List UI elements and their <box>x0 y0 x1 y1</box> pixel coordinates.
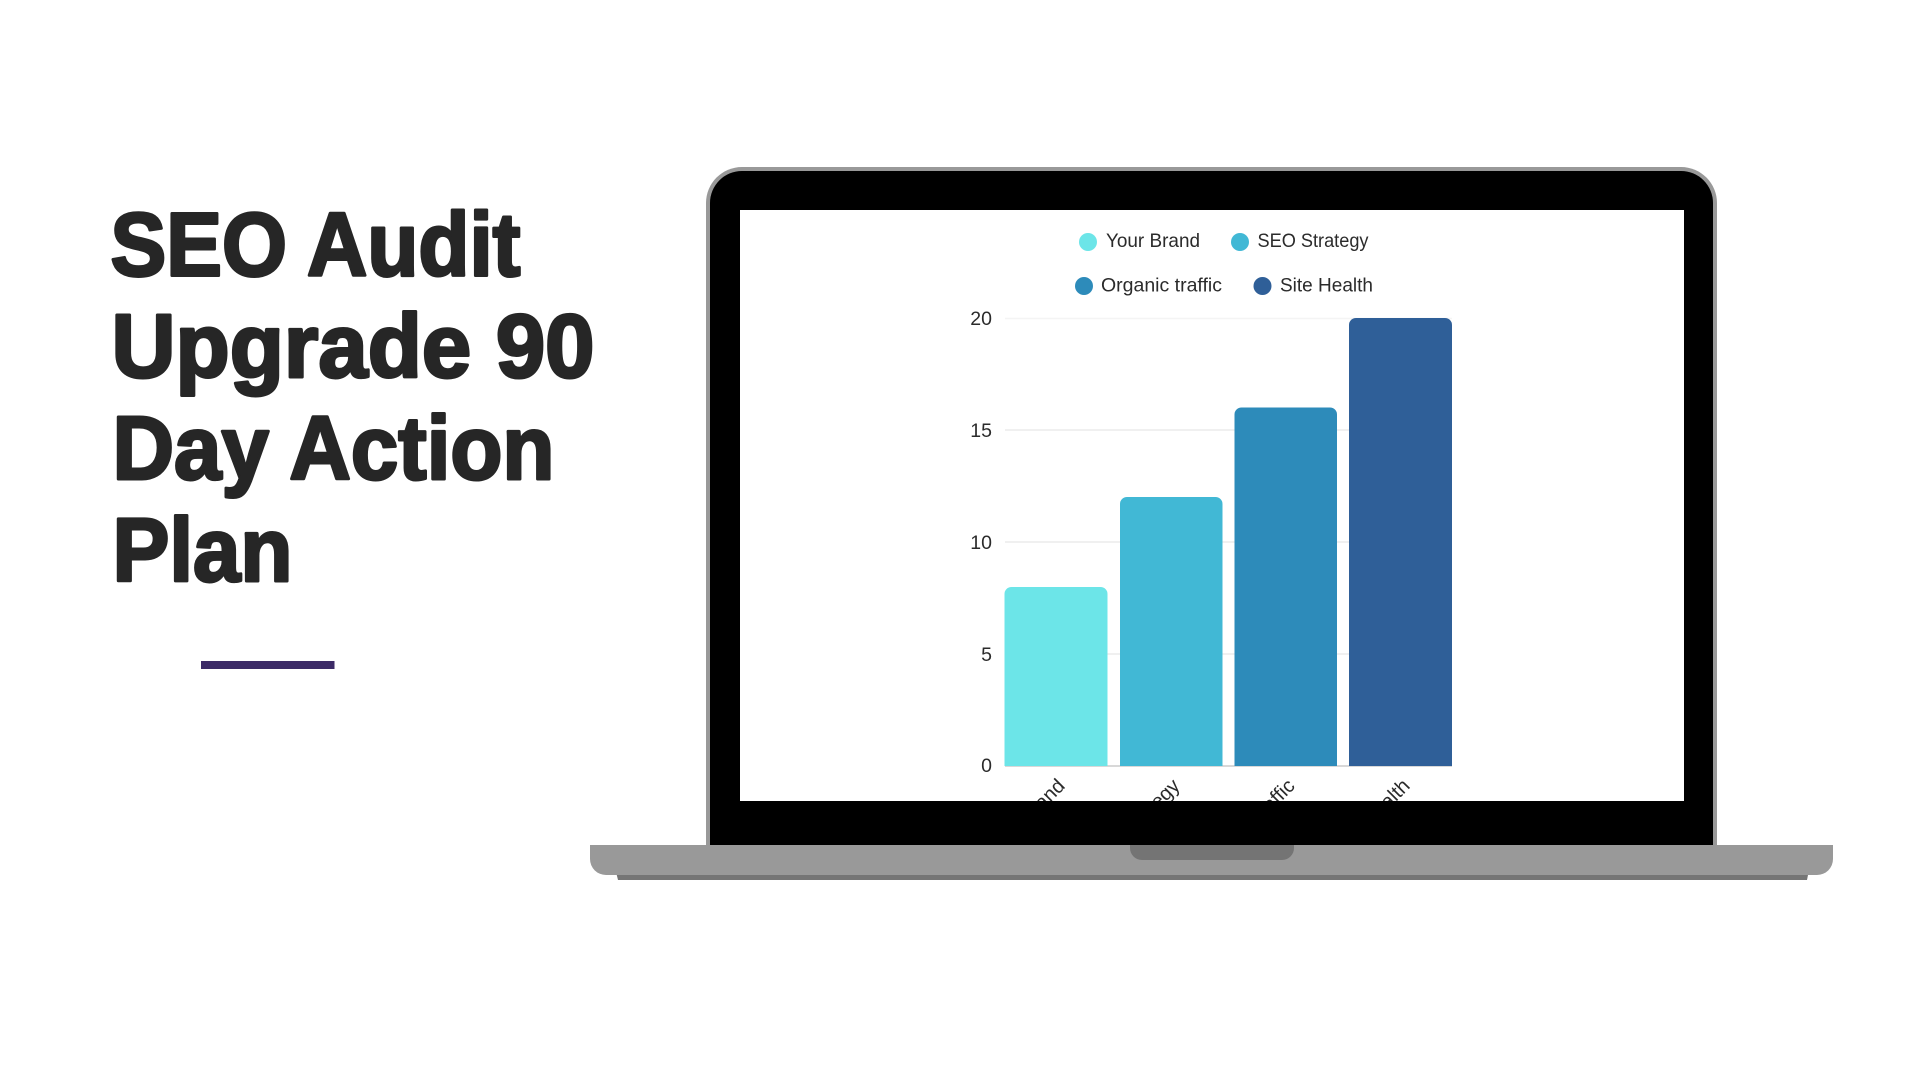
x axis labels: Your Brand <box>984 775 1070 861</box>
title: Day Action <box>112 399 554 499</box>
accent rule under title <box>201 661 334 669</box>
title <box>110 196 594 601</box>
chart legend <box>1075 230 1373 296</box>
bars <box>1004 318 1452 766</box>
x axis labels: Organic traffic <box>1196 775 1300 878</box>
laptop illustration <box>590 167 1833 880</box>
chart legend: SEO Strategy <box>1258 230 1369 252</box>
laptop lid bezel <box>706 167 1717 850</box>
y axis labels: 5 <box>981 644 992 666</box>
y axis labels: 10 <box>970 532 992 554</box>
chart legend: Organic traffic <box>1101 274 1222 296</box>
y axis labels <box>970 308 992 777</box>
y axis labels: 15 <box>970 420 992 442</box>
x axis labels: SEO Strategy <box>1083 775 1185 877</box>
title: Plan <box>112 501 292 601</box>
laptop screen <box>740 210 1684 801</box>
title: SEO Audit <box>110 196 520 296</box>
y axis labels: 20 <box>970 308 992 330</box>
title: Upgrade 90 <box>112 297 594 397</box>
x axis labels <box>1037 778 1410 801</box>
laptop base <box>590 845 1833 880</box>
y axis labels: 0 <box>981 755 992 777</box>
bar chart <box>971 233 1452 801</box>
gridlines <box>1005 318 1452 766</box>
x axis labels: Site Health <box>1330 775 1415 860</box>
chart legend: Your Brand <box>1106 230 1200 252</box>
chart legend: Site Health <box>1280 274 1373 296</box>
laptop notch <box>1130 845 1294 860</box>
